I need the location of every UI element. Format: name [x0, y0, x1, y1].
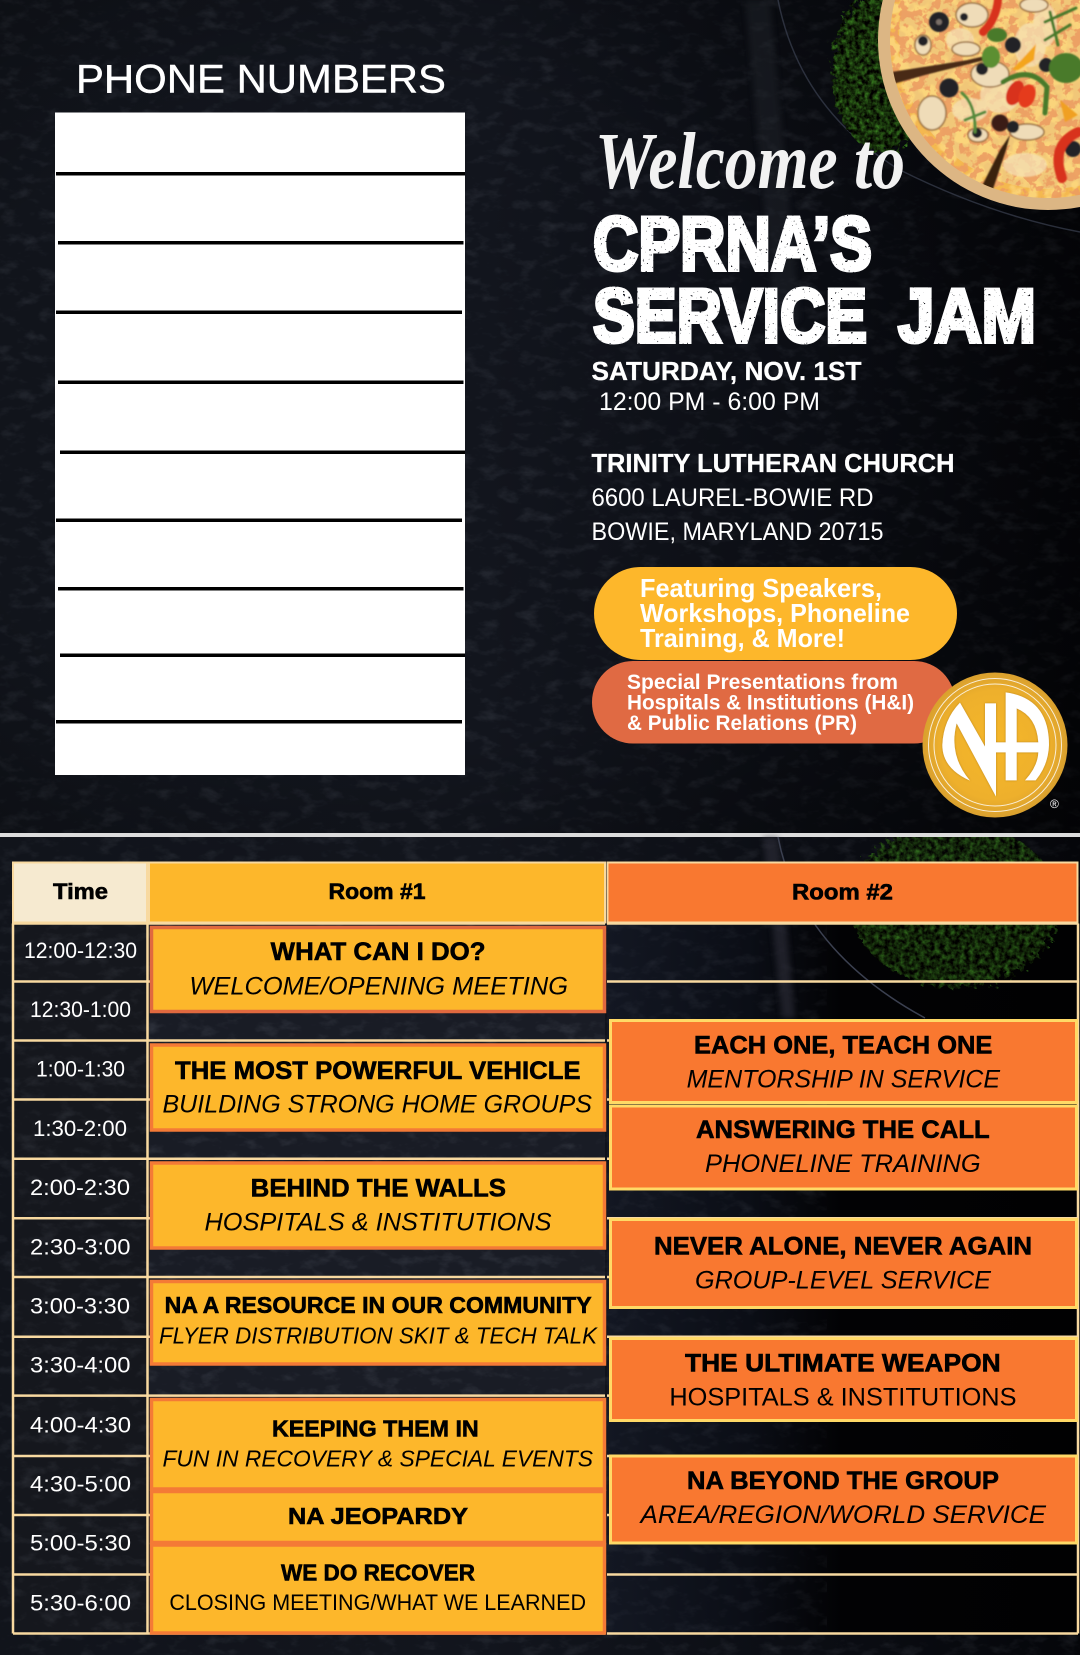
session: what can i do: WHAT CAN I DO? — [271, 938, 486, 966]
time labels: 4:00-4:30 — [30, 1412, 131, 1438]
room 2 empty background — [607, 823, 1078, 1633]
table header: room 1: Room #1 — [328, 879, 426, 904]
session: what can i do: WELCOME/OPENING MEETING — [189, 972, 568, 1000]
time labels: 2:00-2:30 — [30, 1175, 130, 1200]
session: behind the walls — [152, 1163, 604, 1248]
title: welcome script: Welcome to — [595, 118, 905, 206]
session: na beyond the group: AREA/REGION/WORLD SERVICE — [638, 1501, 1046, 1529]
table header: room 2: Room #2 — [792, 880, 893, 904]
time labels: 12:00-12:30 — [24, 938, 137, 963]
heading: phone numbers: PHONE NUMBERS — [76, 58, 446, 102]
session: na beyond the group — [610, 1456, 1076, 1543]
callout: special presentations pill: Hospitals & Institutions (H&I) — [627, 692, 914, 714]
session: na jeopardy: NA JEOPARDY — [288, 1503, 468, 1529]
time labels: 12:30-1:00 — [30, 997, 131, 1022]
time labels: 3:30-4:00 — [30, 1352, 130, 1378]
session: behind the walls: HOSPITALS & INSTITUTIONS — [204, 1208, 552, 1236]
title: CPRNA'S SERVICE JAM: JAM — [898, 274, 1036, 359]
time labels — [24, 938, 137, 1616]
room 1 sessions — [152, 928, 604, 1633]
panel: phone numbers writing box — [55, 112, 465, 775]
session: keeping them in — [152, 1400, 604, 1489]
cheese patches — [946, 3, 1057, 177]
room 2 sessions — [610, 1020, 1076, 1543]
time labels: 1:30-2:00 — [33, 1116, 127, 1141]
session: we do recover: CLOSING MEETING/WHAT WE LEARNED — [169, 1590, 586, 1615]
event location: TRINITY LUTHERAN CHURCH — [592, 448, 954, 478]
callout: featuring speakers pill: Featuring Speakers, — [640, 573, 882, 603]
icon: NA logo: ® — [1050, 797, 1059, 811]
event location: BOWIE, MARYLAND 20715 — [592, 518, 884, 546]
callout: special presentations pill — [592, 661, 955, 744]
session: never alone never again: NEVER ALONE, NEVER AGAIN — [654, 1233, 1032, 1261]
greens behind board — [832, 0, 932, 152]
time labels: 4:30-5:00 — [30, 1472, 131, 1496]
event location: 6600 LAUREL-BOWIE RD — [592, 484, 874, 512]
divider — [0, 833, 1080, 837]
schedule table — [13, 823, 1078, 1634]
session: never alone never again: GROUP-LEVEL SERVICE — [695, 1266, 991, 1294]
background bottom — [0, 837, 1080, 1655]
table header: time: Time — [53, 879, 108, 904]
session: most powerful vehicle: BUILDING STRONG HOME GROUPS — [162, 1090, 592, 1118]
basil and herbs — [982, 28, 1080, 83]
peppers — [983, 0, 1078, 178]
slice cuts — [885, 56, 985, 84]
time labels: 2:30-3:00 — [30, 1234, 130, 1260]
session: na a resource: FLYER DISTRIBUTION SKIT & TECH TALK — [159, 1322, 599, 1348]
session: keeping them in: KEEPING THEM IN — [272, 1416, 479, 1442]
icon: NA logo — [922, 672, 1068, 818]
room 1 gap background — [149, 924, 605, 1633]
session: most powerful vehicle — [152, 1045, 604, 1130]
session: the ultimate weapon: HOSPITALS & INSTITUTIONS — [669, 1383, 1017, 1411]
callout: featuring speakers pill: Training, & More! — [640, 623, 845, 653]
session: what can i do — [152, 928, 604, 1012]
session: keeping them in: FUN IN RECOVERY & SPECIAL EVENTS — [162, 1446, 594, 1472]
session: each one teach one — [610, 1020, 1076, 1102]
session: we do recover: WE DO RECOVER — [281, 1560, 475, 1586]
session: na jeopardy — [152, 1492, 604, 1542]
table header: time — [13, 862, 147, 922]
callout: featuring speakers pill: Workshops, Phoneline — [640, 598, 910, 628]
mushrooms — [915, 0, 1048, 142]
session: behind the walls: BEHIND THE WALLS — [251, 1175, 506, 1203]
session: answering the call — [610, 1106, 1076, 1189]
callout: featuring speakers pill — [594, 567, 957, 660]
grid lines — [13, 924, 1078, 1634]
session: answering the call: ANSWERING THE CALL — [696, 1116, 990, 1144]
image: pizza on wooden board with greens — [832, 0, 1080, 210]
session: na a resource — [152, 1282, 604, 1364]
title: CPRNA'S SERVICE JAM: CPRNA’S — [593, 202, 872, 287]
table header: room 2 — [608, 862, 1078, 922]
event date and time: 12:00 PM - 6:00 PM — [599, 388, 820, 416]
event location — [592, 448, 954, 546]
session: never alone never again — [610, 1220, 1076, 1308]
callout: special presentations pill: & Public Relations (PR) — [627, 712, 857, 735]
session: we do recover — [152, 1545, 604, 1633]
session: answering the call: PHONELINE TRAINING — [705, 1150, 981, 1178]
time column cells — [13, 924, 147, 1633]
session: most powerful vehicle: THE MOST POWERFUL VEHICLE — [175, 1057, 581, 1085]
olives — [918, 12, 1080, 157]
session: na beyond the group: NA BEYOND THE GROUP — [687, 1467, 999, 1495]
time labels: 3:00-3:30 — [30, 1294, 130, 1318]
session: the ultimate weapon: THE ULTIMATE WEAPON — [685, 1349, 1001, 1377]
time labels: 5:30-6:00 — [30, 1590, 131, 1616]
time labels: 1:00-1:30 — [36, 1056, 125, 1082]
title: CPRNA'S SERVICE JAM: SERVICE — [593, 274, 867, 359]
session: na a resource: NA A RESOURCE IN OUR COMMUNITY — [165, 1292, 592, 1318]
title: CPRNA'S SERVICE JAM — [593, 202, 1036, 359]
table header: room 1 — [149, 862, 605, 922]
time labels: 5:00-5:30 — [30, 1530, 131, 1556]
session: the ultimate weapon — [610, 1338, 1076, 1420]
callout: special presentations pill: Special Presentations from — [627, 671, 898, 694]
wooden board — [878, 0, 1080, 210]
event date and time: SATURDAY, NOV. 1ST — [592, 356, 862, 386]
event date and time — [592, 356, 862, 416]
background top — [0, 0, 1080, 833]
session: each one teach one: EACH ONE, TEACH ONE — [694, 1032, 992, 1060]
session: each one teach one: MENTORSHIP IN SERVICE — [687, 1066, 1000, 1094]
